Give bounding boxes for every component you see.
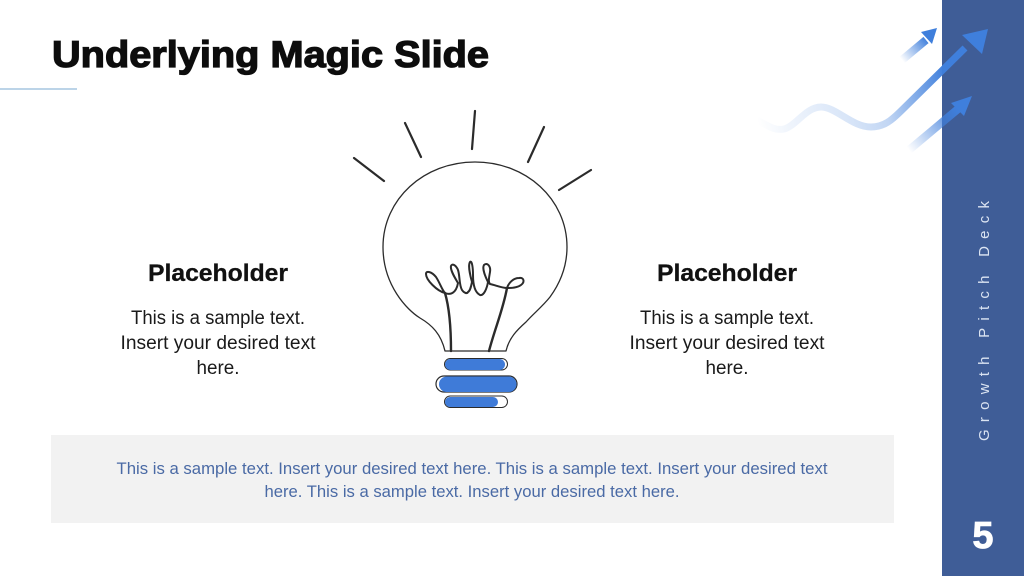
left heading: Placeholder [148, 260, 288, 287]
arrow: lower [909, 96, 972, 150]
left body: This is a sample text. [131, 308, 305, 329]
right heading: Placeholder [657, 260, 797, 287]
title: Underlying Magic Slide [52, 34, 489, 75]
icon: light rays [354, 111, 591, 190]
right body: Insert your desired text [630, 333, 825, 354]
icon: bulb glass [383, 162, 567, 351]
left body [120, 308, 316, 379]
right body [630, 308, 825, 379]
title underline [0, 88, 77, 90]
right body: This is a sample text. [640, 308, 814, 329]
light bulb icon [354, 111, 591, 408]
left body: Insert your desired text [120, 333, 316, 354]
callout text: here. This is a sample text. Insert your desired text here. [264, 483, 680, 501]
growth arrows [757, 28, 988, 150]
callout text: This is a sample text. Insert your desired text here. This is a sample text. Insert your desired text [116, 460, 828, 478]
icon: bulb base [436, 358, 517, 408]
right body: here. [706, 358, 748, 379]
arrow: main wavy [757, 29, 988, 129]
bottom callout [51, 435, 894, 523]
arrow: small top [902, 28, 937, 60]
callout text [116, 460, 828, 501]
right text block [630, 260, 825, 379]
sidebar label: Growth Pitch Deck [976, 200, 993, 441]
left text block [120, 260, 316, 379]
page number: 5 [972, 515, 994, 557]
left body: here. [196, 358, 240, 379]
sidebar [942, 0, 1024, 576]
icon: filament [426, 262, 523, 351]
